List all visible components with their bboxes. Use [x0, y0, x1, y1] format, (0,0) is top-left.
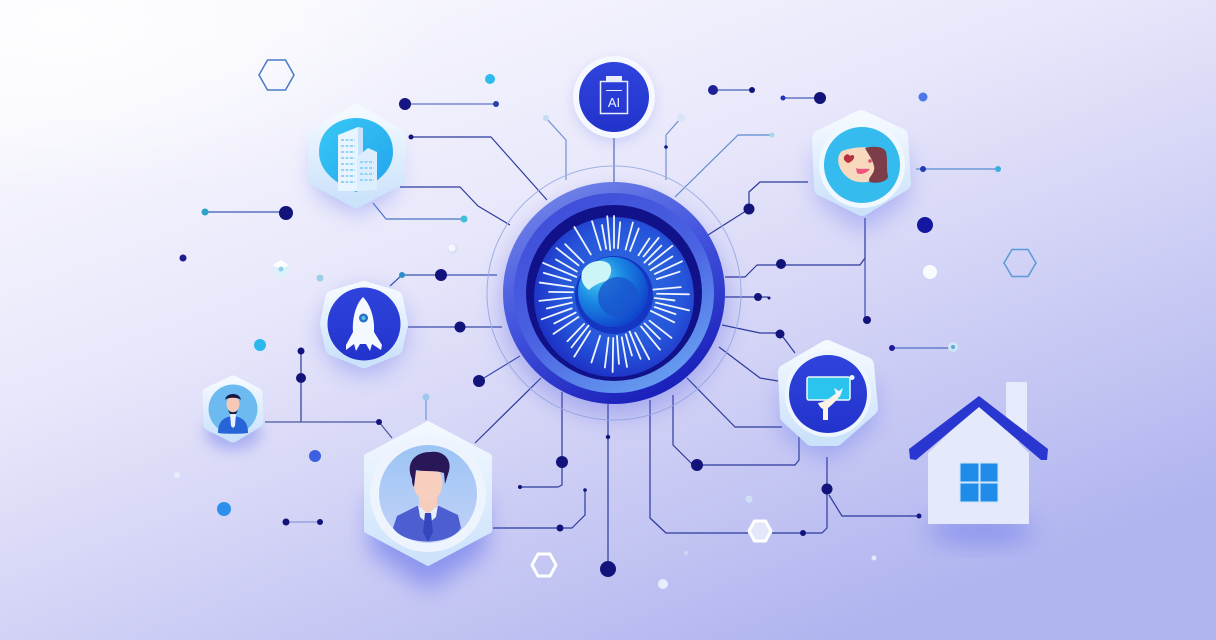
node: wrench and panel [782, 348, 874, 460]
house [909, 382, 1048, 544]
outline hexagon top left [259, 60, 294, 90]
icon: small cube [273, 260, 289, 278]
node: large person [366, 423, 490, 590]
icon: towers [338, 127, 377, 191]
white hexagon bottom [532, 554, 556, 576]
outline hexagon right [1004, 250, 1036, 276]
icon: screen with wrench [807, 375, 855, 420]
outer bezel [503, 182, 725, 404]
radial rays [539, 216, 689, 372]
node: face [816, 118, 908, 232]
pupil [575, 256, 653, 334]
central eye [487, 166, 741, 420]
walls [928, 404, 1029, 524]
roof [909, 396, 1048, 460]
dark ring [526, 205, 702, 381]
icon: rocket [346, 297, 382, 351]
icon: man with dark hair [218, 394, 248, 434]
network dots [174, 74, 1001, 589]
node: small person [205, 381, 261, 450]
icon: man in suit [393, 452, 461, 542]
connector lines [205, 90, 998, 569]
thin orbit ring [487, 166, 741, 420]
chimney [1006, 382, 1027, 442]
white hexagon junction [749, 521, 771, 541]
icon: AI clipboard: AI [608, 95, 620, 110]
pupil highlight [581, 261, 611, 290]
node: building [316, 112, 398, 214]
iris [534, 217, 694, 377]
window [959, 462, 999, 503]
icon: smiling face with heart [838, 147, 888, 183]
node: AI document [573, 56, 655, 142]
node: rocket [322, 288, 406, 374]
